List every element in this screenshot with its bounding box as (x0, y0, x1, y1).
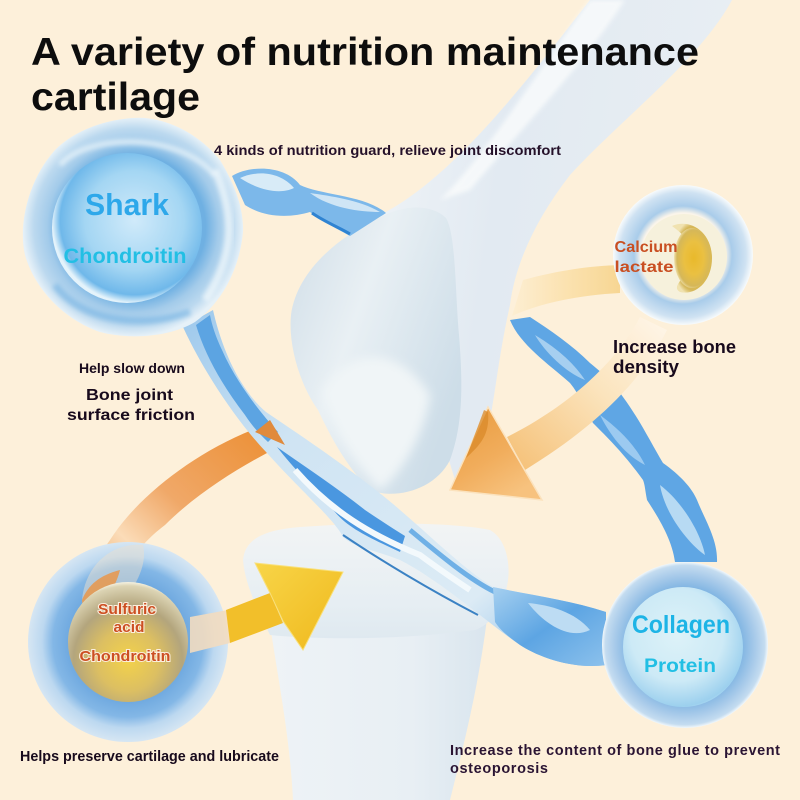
title: cartilage (31, 76, 200, 119)
label: Collagen: Collagen (632, 611, 730, 639)
caption: increase bone density: density (613, 357, 679, 377)
label: Calcium: Calcium (614, 239, 678, 256)
subtitle: 4 kinds of nutrition guard, relieve joint discomfort (214, 142, 561, 158)
label: Protein: Protein (644, 656, 716, 677)
label: lactate: lactate (614, 259, 674, 276)
arrow: yellow to tibia (226, 563, 343, 650)
label: acid: acid (114, 620, 144, 636)
caption: increase bone density: Increase bone (613, 337, 736, 357)
femur bone (291, 0, 732, 494)
label: Sulfuric: Sulfuric (98, 602, 156, 618)
bubble: collagen protein (602, 562, 768, 728)
water ribbon: upper left strand (232, 169, 386, 236)
tibia bone (243, 524, 509, 800)
caption: bone glue: osteoporosis (450, 761, 548, 777)
caption: bone glue (450, 743, 780, 777)
bubble: shark chondroitin (23, 118, 243, 336)
arrow: orange arc from sulfuric acid bubble (82, 430, 267, 602)
bubble: sulfuric acid chondroitin (28, 542, 230, 742)
caption: preserve cartilage: Helps preserve cartilage and lubricate (20, 749, 279, 765)
water ribbon: main diagonal strand (183, 310, 606, 666)
caption: bone glue: Increase the content of bone glue to prevent (450, 743, 780, 759)
arrow head: orange triangle (450, 407, 542, 500)
caption: help slow down (67, 360, 195, 424)
caption: help slow down: surface friction (67, 407, 195, 424)
label: Chondroitin: Chondroitin (64, 245, 186, 268)
label: Chondroitin: Chondroitin (80, 648, 170, 665)
bubble: calcium lactate (613, 185, 753, 325)
caption: help slow down: Help slow down (79, 360, 185, 376)
water ribbon: right strand (510, 317, 717, 562)
arrow: band from calcium lactate to femur (512, 265, 620, 316)
caption: help slow down: Bone joint (86, 387, 174, 404)
caption: increase bone density (613, 337, 736, 377)
label: Shark: Shark (85, 187, 170, 222)
arrow: band from calcium lactate to triangle (507, 317, 667, 470)
title: A variety of nutrition maintenance (31, 31, 699, 74)
